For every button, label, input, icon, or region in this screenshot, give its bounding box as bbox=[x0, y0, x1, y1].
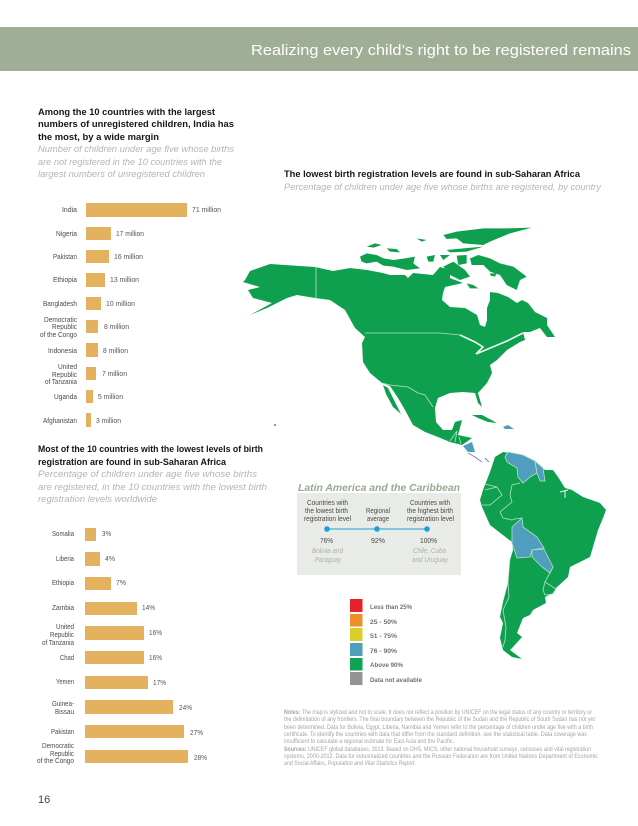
bar chart: lowest registration levels: 4% bbox=[105, 556, 115, 563]
bar chart: unregistered children: 13 million bbox=[110, 277, 139, 284]
bar chart: unregistered children: Ethiopia bbox=[53, 277, 77, 284]
bar chart: unregistered children: 71 million bbox=[192, 207, 221, 214]
heading: lowest levels of birth registration: Percentage of children under age five whose births bbox=[38, 469, 258, 479]
bar chart: unregistered children: Pakistan bbox=[53, 254, 77, 261]
notes and sources: and Social Affairs, Population and Vital Statistics Report. bbox=[284, 761, 416, 767]
bar chart: lowest registration levels: Ethiopia bbox=[52, 580, 74, 587]
bar chart: unregistered children: Uganda bbox=[54, 394, 77, 401]
bar chart: unregistered children: 8 million bbox=[104, 324, 129, 331]
map legend: 76 - 90% bbox=[370, 648, 397, 655]
heading: map bbox=[284, 169, 602, 192]
highest level column: and Uruguay bbox=[412, 557, 448, 564]
heading: largest numbers of unregistered children: numbers of unregistered children, India has bbox=[38, 119, 234, 129]
bar chart: lowest registration levels: 16% bbox=[149, 655, 162, 662]
bar chart: lowest registration levels: United bbox=[56, 624, 74, 631]
heading: largest numbers of unregistered children: Number of children under age five whose births bbox=[38, 144, 235, 154]
bar chart: lowest registration levels: Somalia bbox=[52, 531, 74, 538]
bar chart: unregistered children: of Tanzania bbox=[45, 379, 77, 386]
bar chart: lowest registration levels: 3% bbox=[102, 531, 111, 538]
page number: 16 bbox=[38, 794, 50, 806]
lowest level column bbox=[304, 500, 351, 564]
bar chart: unregistered children: 16 million bbox=[114, 254, 143, 261]
heading: map: Percentage of children under age five whose births are registered, by country bbox=[284, 182, 602, 192]
notes and sources: certificate. To identify the countries with data that differ from the standard definition, see the statistical table. Data coverage was bbox=[284, 732, 587, 738]
bar chart: lowest registration levels: Guinea- bbox=[52, 701, 75, 708]
bar chart: lowest registration levels: Bissau bbox=[55, 709, 74, 716]
highest level column: registration level bbox=[407, 516, 454, 523]
bar chart: lowest registration levels: Democratic bbox=[42, 743, 74, 750]
bar chart: unregistered children bbox=[40, 203, 221, 427]
heading: largest numbers of unregistered children: largest numbers of unregistered children bbox=[38, 169, 205, 179]
heading: lowest levels of birth registration: registration levels worldwide bbox=[38, 494, 157, 504]
bar chart: unregistered children: 10 million bbox=[106, 301, 135, 308]
lowest level column: Countries with bbox=[307, 500, 348, 507]
regional average column: average bbox=[367, 516, 389, 523]
bar chart: lowest registration levels: 27% bbox=[190, 730, 203, 737]
highest level column bbox=[407, 500, 454, 564]
range line bbox=[324, 526, 430, 532]
bar chart: unregistered children: Republic bbox=[52, 324, 77, 331]
bar chart: unregistered children: Afghanistan bbox=[43, 418, 77, 425]
bar chart: lowest registration levels: of the Congo bbox=[37, 758, 74, 765]
bar chart: lowest registration levels: Republic bbox=[50, 751, 74, 758]
bar chart: unregistered children: Democratic bbox=[44, 317, 77, 324]
lowest level column: registration level bbox=[304, 516, 351, 523]
bar chart: unregistered children: Republic bbox=[52, 372, 77, 379]
regional average column: 92% bbox=[371, 538, 385, 545]
bar chart: lowest registration levels: of Tanzania bbox=[42, 640, 74, 647]
bar chart: lowest registration levels: 7% bbox=[116, 580, 126, 587]
lowest level column: 76% bbox=[320, 538, 333, 545]
notes and sources bbox=[284, 710, 598, 767]
header band bbox=[0, 27, 638, 71]
heading: lowest levels of birth registration: registration are found in sub-Saharan Africa bbox=[38, 457, 227, 467]
map legend bbox=[350, 599, 422, 685]
bar chart: lowest registration levels: 28% bbox=[194, 755, 207, 762]
heading: lowest levels of birth registration: Most of the 10 countries with the lowest levels of birth bbox=[38, 444, 263, 454]
heading: largest numbers of unregistered children: the most, by a wide margin bbox=[38, 132, 159, 142]
heading: largest numbers of unregistered children bbox=[38, 107, 235, 179]
heading: largest numbers of unregistered children: Among the 10 countries with the largest bbox=[38, 107, 215, 117]
bar chart: unregistered children: India bbox=[62, 207, 77, 214]
highest level column: the highest birth bbox=[407, 508, 453, 515]
bar chart: unregistered children: Nigeria bbox=[56, 231, 77, 238]
notes and sources: Notes: The map is stylized and not to scale. It does not reflect a position by UNICEF on the legal status of any country or territory or bbox=[284, 710, 592, 716]
heading: largest numbers of unregistered children: are not registered in the 10 countries with the bbox=[38, 157, 222, 167]
bar chart: unregistered children: United bbox=[58, 364, 77, 371]
bar chart: unregistered children: 8 million bbox=[103, 348, 128, 355]
bar chart: unregistered children: of the Congo bbox=[40, 332, 77, 339]
highest level column: Countries with bbox=[410, 500, 450, 507]
bar chart: lowest registration levels: Chad bbox=[60, 655, 74, 662]
heading: lowest levels of birth registration bbox=[38, 444, 267, 504]
notes and sources: Sources: UNICEF global databases, 2013. Based on DHS, MICS, other national household surveys, censuses and vital registration bbox=[284, 747, 591, 753]
heading: lowest levels of birth registration: are registered, in the 10 countries with the lowest birth bbox=[38, 482, 267, 492]
blue countries: Venezuela, Guyana, Bolivia, Paraguay bbox=[505, 452, 553, 573]
map legend: 51 - 75% bbox=[370, 633, 397, 640]
panel: Latin America and the Caribbean bbox=[297, 483, 461, 575]
notes and sources: been determined. Data for Bolivia, Egypt, Liberia, Namibia and Yemen refer to the percentage of children under age five with a birth bbox=[284, 725, 593, 731]
bar chart: lowest registration levels: Republic bbox=[50, 632, 74, 639]
map legend: 25 - 50% bbox=[370, 619, 397, 626]
map: South America bbox=[480, 452, 606, 659]
map legend: Above 90% bbox=[370, 662, 403, 669]
bar chart: lowest registration levels: Yemen bbox=[56, 679, 74, 686]
bar chart: lowest registration levels: 14% bbox=[142, 605, 155, 612]
regional average column bbox=[366, 508, 390, 545]
lowest level column: Bolivia and bbox=[312, 548, 344, 555]
lowest level column: Paraguay bbox=[315, 557, 341, 564]
bar chart: lowest registration levels: 17% bbox=[153, 680, 166, 687]
regional average column: Regional bbox=[366, 508, 390, 515]
bar chart: unregistered children: Indonesia bbox=[48, 348, 77, 355]
heading: map: The lowest birth registration levels are found in sub-Saharan Africa bbox=[284, 169, 581, 179]
map legend: Less than 25% bbox=[370, 604, 412, 611]
bar chart: lowest registration levels bbox=[37, 528, 207, 765]
notes and sources: the delimitation of any frontiers. The final boundary between the Republic of the Sudan and the Republic of South Sudan has not yet bbox=[284, 717, 595, 723]
bar chart: unregistered children: 5 million bbox=[98, 394, 123, 401]
bar chart: lowest registration levels: Pakistan bbox=[51, 729, 74, 736]
highest level column: Chile, Cuba bbox=[413, 548, 446, 555]
bar chart: lowest registration levels: 24% bbox=[179, 705, 192, 712]
bar chart: lowest registration levels: Liberia bbox=[56, 556, 74, 563]
notes and sources: systems, 2000-2012. Data for industrialized countries and the Russian Federation are from United Nations Department of Economic bbox=[284, 754, 598, 760]
bar chart: lowest registration levels: Zambia bbox=[52, 605, 74, 612]
map legend: Data not available bbox=[370, 677, 422, 684]
bar chart: unregistered children: 17 million bbox=[116, 231, 144, 238]
bar chart: unregistered children: 7 million bbox=[102, 371, 127, 378]
arctic islands bbox=[360, 228, 532, 290]
header band: Realizing every child’s right to be registered remains bbox=[251, 42, 631, 59]
panel: Latin America and the Caribbean: Latin America and the Caribbean bbox=[298, 483, 460, 494]
lowest level column: the lowest birth bbox=[305, 508, 348, 515]
highest level column: 100% bbox=[420, 538, 437, 545]
caribbean islands bbox=[472, 415, 497, 423]
notes and sources: insufficient to calculate a regional estimate for East Asia and the Pacific. bbox=[284, 739, 454, 745]
bar chart: unregistered children: Bangladesh bbox=[43, 301, 77, 308]
bar chart: lowest registration levels: 16% bbox=[149, 630, 162, 637]
bar chart: unregistered children: 3 million bbox=[96, 418, 121, 425]
map: North America bbox=[243, 228, 555, 462]
